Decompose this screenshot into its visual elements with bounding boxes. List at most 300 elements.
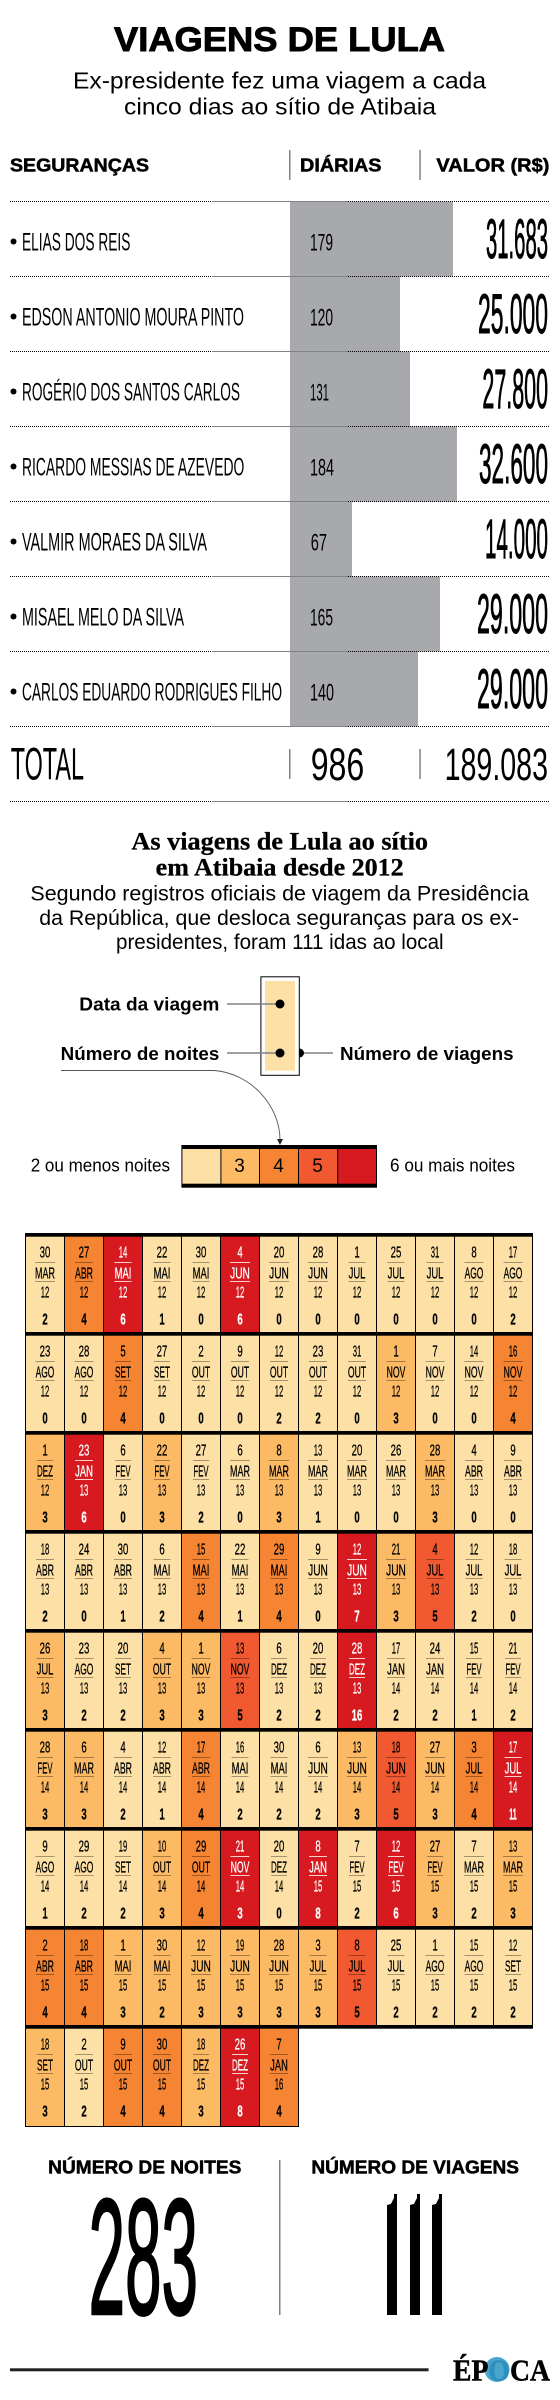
cell: 29 OUT 14 (182, 1827, 220, 1926)
cell: 19 JUN 15: 15 (236, 1977, 244, 1995)
calendar of trips (25, 1233, 533, 2127)
cell: 26 DEZ 15: DEZ (232, 2056, 248, 2074)
cell: 13 MAR 13 (298, 1431, 338, 1530)
calendar row 3 (26, 1431, 532, 1530)
cell: 24 ABR 13: ABR (75, 1560, 93, 1579)
cell: 23 OUT 12 (298, 1332, 338, 1431)
cell: 1 NOV 13: 13 (197, 1680, 205, 1698)
cell: 2 OUT 12: 12 (197, 1383, 205, 1401)
cell: 29 AGO 14: 14 (80, 1878, 88, 1896)
legend: how to read a cell (61, 977, 514, 1075)
cell: 29 OUT 14: 14 (197, 1878, 205, 1896)
cell: 12 JUL 13: 2 (471, 1607, 477, 1625)
cell: 21 FEV 14: 14 (509, 1680, 517, 1698)
cell: 21 JUN 13: 21 (392, 1540, 400, 1558)
cell: 6 FEV 13: 13 (119, 1482, 127, 1500)
cell: 3 JUL 14: 14 (470, 1779, 478, 1797)
cell: 7 NOV 12: NOV (426, 1362, 445, 1381)
calendar row 4 (26, 1530, 532, 1629)
cell: 23 AGO 12: 0 (42, 1409, 48, 1427)
cell: 16 MAI 14: MAI (232, 1759, 248, 1777)
cell: 16 MAI 14 (220, 1728, 260, 1827)
cell: 8 MAR 13: 8 (276, 1441, 282, 1459)
cell: 20 JUN 12: 12 (275, 1284, 283, 1302)
cell: 30 ABR 13: 13 (119, 1581, 127, 1599)
cell: 30 MAI 12: 0 (198, 1310, 204, 1328)
cell: 30 MAR 12 (26, 1233, 64, 1332)
cell: 2 ABR 15: 15 (41, 1977, 49, 1995)
cell: 13 NOV 13: 5 (237, 1706, 243, 1724)
row: Carlos Eduardo Rodrigues Filho (10, 652, 548, 726)
cell: 30 MAI 15: 2 (159, 2003, 165, 2021)
cell: 12 JUL 13: 12 (470, 1540, 478, 1558)
section intro text: Segundo registros oficiais de viagem da Presidência (30, 883, 529, 906)
row: Elias dos Reis: 179 (310, 230, 333, 256)
row: Edson Antonio Moura Pinto: 120 (310, 304, 333, 332)
cell: 3 JUL 14: 4 (471, 1805, 477, 1823)
cell: 23 AGO 13: 13 (80, 1680, 88, 1698)
cell: 6 DEZ 13: 13 (275, 1680, 283, 1698)
cell: 28 FEV 14 (26, 1728, 64, 1827)
cell: 7 NOV 12: 0 (432, 1409, 438, 1427)
cell: 12 JUL 13: 13 (470, 1581, 478, 1599)
cell: 16 NOV 12: 12 (509, 1383, 517, 1401)
cell: 20 JUN 12: JUN (269, 1264, 289, 1282)
cell: 22 FEV 13 (142, 1431, 182, 1530)
cell: 5 SET 12 (104, 1332, 142, 1431)
cell: 28 DEZ 13: 28 (352, 1639, 362, 1657)
cell: 26 JUL 13: JUL (37, 1660, 53, 1678)
cell: 30 MAI 14 (260, 1728, 298, 1827)
cell: 4 ABR 13 (454, 1431, 494, 1530)
cell: 8 JUL 15: 15 (353, 1977, 361, 1995)
title: VIAGENS DE LULA (114, 21, 445, 59)
cell: 12 ABR 14: 14 (158, 1779, 166, 1797)
cell: 6 DEZ 13: 2 (276, 1706, 282, 1724)
cell: 24 JAN 14: JAN (426, 1660, 444, 1678)
legend: how to read a cell: Número de noites (61, 1044, 219, 1064)
cell: 10 OUT 14: OUT (153, 1857, 171, 1876)
cell: 7 JAN 16: 7 (276, 2035, 282, 2053)
cell: 31 JUL 12: 0 (432, 1310, 438, 1328)
cell: 7 NOV 12 (416, 1332, 454, 1431)
cell: 6 MAI 13: 13 (158, 1581, 166, 1599)
cell: 6 MAR 14: MAR (74, 1758, 94, 1777)
cell: 6 FEV 13 (104, 1431, 142, 1530)
cell: 20 MAR 13: 20 (352, 1441, 362, 1459)
cell: 23 AGO 13: AGO (75, 1659, 93, 1678)
cell: 18 ABR 13 (26, 1530, 64, 1629)
cell: 28 JUN 15 (260, 1926, 298, 2025)
cell: 1 DEZ 12: DEZ (37, 1462, 53, 1480)
cell: 20 MAR 13 (338, 1431, 376, 1530)
cell: 13 JUN 14: 13 (353, 1738, 361, 1756)
cell: 21 FEV 14: 21 (509, 1639, 517, 1657)
cell: 1 JUL 12: 1 (354, 1243, 360, 1261)
table total: TOTAL (11, 738, 84, 790)
cell: 12 OUT 12: 2 (276, 1409, 282, 1427)
cell: 26 DEZ 15 (220, 2025, 260, 2126)
cell: 26 MAR 13: MAR (386, 1461, 406, 1480)
cell: 20 JUN 12: 20 (274, 1243, 284, 1261)
cell: 2 OUT 15: OUT (75, 2055, 93, 2074)
row: Carlos Eduardo Rodrigues Filho: CARLOS EDUARDO RODRIGUES FILHO (22, 678, 282, 706)
cell: 1 NOV 13: 1 (198, 1639, 204, 1657)
cell: 13 MAR 15 (494, 1827, 532, 1926)
cell: 9 AGO 14: 14 (41, 1878, 49, 1896)
cell: 28 JUN 12: JUN (308, 1264, 328, 1282)
cell: 23 OUT 12: OUT (309, 1362, 327, 1381)
calendar row 9 (26, 2025, 298, 2126)
calendar row 7 (26, 1827, 532, 1926)
cell: 17 AGO 12: 12 (509, 1284, 517, 1302)
cell: 1 NOV 12: 1 (393, 1342, 399, 1360)
section intro text (30, 883, 529, 954)
cell: 10 OUT 14: 14 (158, 1878, 166, 1896)
cell: 28 JUN 12: 0 (315, 1310, 321, 1328)
cell: 31 OUT 12 (338, 1332, 376, 1431)
cell: 19 JUN 15 (220, 1926, 260, 2025)
cell: 17 AGO 12 (494, 1233, 532, 1332)
cell: 10 OUT 14: 10 (158, 1837, 166, 1855)
cell: 12 ABR 14: ABR (153, 1758, 171, 1777)
cell: 18 JUN 14 (376, 1728, 416, 1827)
cell: 18 JUN 14: 5 (393, 1805, 399, 1823)
cell: 29 MAI 13: MAI (271, 1561, 287, 1579)
cell: 25 JUL 12: 0 (393, 1310, 399, 1328)
cell: 27 ABR 12: ABR (75, 1263, 93, 1282)
cell: 20 JUN 12: 0 (276, 1310, 282, 1328)
cell: 12 JUL 13: JUL (466, 1561, 482, 1579)
cell: 2 OUT 12: 0 (198, 1409, 204, 1427)
calendar row 1 (26, 1233, 532, 1332)
cell: 30 MAI 12: 30 (196, 1243, 206, 1261)
cell: 3 JUL 14: JUL (466, 1759, 482, 1777)
cell: 4 JUL 13 (416, 1530, 454, 1629)
cell: 26 MAR 13 (376, 1431, 416, 1530)
cell: 2 ABR 15: ABR (36, 1956, 54, 1975)
cell: 28 MAR 13: 13 (431, 1482, 439, 1500)
cell: 1 NOV 13: NOV (192, 1659, 211, 1678)
cell: 18 SET 15: 3 (42, 2102, 48, 2120)
cell: 1 MAI 15: 3 (120, 2003, 126, 2021)
cell: 31 OUT 12: 31 (353, 1342, 361, 1360)
cell: 29 MAI 13: 29 (274, 1540, 284, 1558)
cell: 28 AGO 12: 12 (80, 1383, 88, 1401)
cell: 28 AGO 12: 0 (81, 1409, 87, 1427)
cell: 8 JAN 15 (298, 1827, 338, 1926)
cell: 24 ABR 13: 0 (81, 1607, 87, 1625)
cell: 31 OUT 12: 0 (354, 1409, 360, 1427)
cell: 28 DEZ 13 (338, 1629, 376, 1728)
cell: 7 MAR 15: 7 (471, 1837, 477, 1855)
cell: 13 MAR 13: MAR (308, 1461, 328, 1480)
cell: 30 MAI 15: MAI (154, 1957, 170, 1975)
row: Valmir Moraes da Silva (10, 502, 548, 576)
cell: 13 JUN 14: 3 (354, 1805, 360, 1823)
cell: 29 OUT 14: OUT (192, 1857, 210, 1876)
cell: 20 SET 13 (104, 1629, 142, 1728)
cell: 27 ABR 12 (64, 1233, 104, 1332)
cell: 12 SET 15 (494, 1926, 532, 2025)
table header: SEGURANÇAS (10, 156, 149, 176)
cell: 1 JUL 12: 0 (354, 1310, 360, 1328)
cell: 16 NOV 12: 16 (509, 1342, 517, 1360)
cell: 8 JUL 15: 8 (354, 1936, 360, 1954)
cell: 8 MAR 13: 13 (275, 1482, 283, 1500)
cell: 3 JUL 15: 3 (315, 1936, 321, 1954)
cell: 25 JUL 15 (376, 1926, 416, 2025)
cell: 4 OUT 13: 3 (159, 1706, 165, 1724)
cell: 15 MAI 13: 4 (198, 1607, 204, 1625)
cell: 12 ABR 14: 12 (158, 1738, 166, 1756)
cell: 17 JUL 14: 17 (509, 1738, 517, 1756)
cell: 18 DEZ 15: 15 (197, 2076, 205, 2094)
cell: 9 OUT 12 (220, 1332, 260, 1431)
cell: 9 OUT 12: OUT (231, 1362, 249, 1381)
cell: 8 MAR 13 (260, 1431, 298, 1530)
cell: 31 JUL 12: JUL (427, 1264, 443, 1282)
cell: 13 MAR 13: 13 (314, 1482, 322, 1500)
cell: 7 JAN 16 (260, 2025, 298, 2126)
row: Misael Melo da Silva: MISAEL MELO DA SILVA (22, 604, 184, 632)
stat: numero de viagens: 111 (377, 2165, 450, 2352)
color scale legend (31, 1145, 515, 1188)
cell: 1 MAI 15: 15 (119, 1977, 127, 1995)
cell: 8 JAN 15: 15 (314, 1878, 322, 1896)
cell: 17 JUL 14: 11 (509, 1806, 517, 1824)
cell: 26 DEZ 15: 26 (235, 2035, 245, 2053)
cell: 4 JUL 13: 5 (432, 1607, 438, 1625)
cell: 18 ABR 15: ABR (75, 1956, 93, 1975)
legend: how to read a cell: Data da viagem (79, 995, 219, 1015)
cell: 28 FEV 14: 28 (40, 1738, 50, 1756)
cell: 12 OUT 12: 12 (275, 1342, 283, 1360)
cell: 30 MAR 12: 2 (42, 1310, 48, 1328)
cell: 8 AGO 12: 8 (471, 1243, 477, 1261)
cell: 4 ABR 14: 4 (120, 1738, 126, 1756)
cell: 18 JUL 13: 0 (510, 1607, 516, 1625)
cell: 18 JUL 13: JUL (505, 1561, 521, 1579)
cell: 25 JUL 12: 12 (392, 1284, 400, 1302)
cell: 20 DEZ 14: 14 (275, 1878, 283, 1896)
cell: 23 AGO 12: 12 (41, 1383, 49, 1401)
row: Rogerio dos Santos Carlos (10, 352, 548, 426)
cell: 15 FEV 14: FEV (466, 1660, 482, 1678)
cell: 4 ABR 13: 0 (471, 1508, 477, 1526)
cell: 8 MAR 13: MAR (269, 1461, 289, 1480)
cell: 7 FEV 15: 15 (353, 1878, 361, 1896)
table: segurancas, diarias e valor (10, 150, 550, 802)
cell: 13 MAR 15: 15 (509, 1878, 517, 1896)
cell: 15 AGO 15 (454, 1926, 494, 2025)
cell: 22 MAI 13: 1 (237, 1607, 243, 1625)
cell: 28 DEZ 13: DEZ (349, 1660, 365, 1678)
cell: 6 MAI 13 (142, 1530, 182, 1629)
cell: 3 JUL 14: 3 (471, 1738, 477, 1756)
cell: 30 OUT 15: 30 (157, 2035, 167, 2053)
cell: 25 JUL 12: JUL (388, 1264, 404, 1282)
cell: 9 OUT 12: 0 (237, 1409, 243, 1427)
row: Carlos Eduardo Rodrigues Filho: 140 (310, 680, 334, 706)
cell: 14 NOV 12: 12 (470, 1383, 478, 1401)
cell: 28 JUN 12 (298, 1233, 338, 1332)
cell: 1 AGO 15: 2 (432, 2003, 438, 2021)
cell: 4 OUT 13: OUT (153, 1659, 171, 1678)
cell: 4 JUN 12: 4 (237, 1243, 243, 1261)
cell: 30 MAI 14: 2 (276, 1805, 282, 1823)
cell: 20 MAR 13: MAR (347, 1461, 367, 1480)
cell: 27 FEV 15 (416, 1827, 454, 1926)
cell: 28 AGO 12: 28 (79, 1342, 89, 1360)
cell: 20 DEZ 14: 20 (274, 1837, 284, 1855)
cell: 30 OUT 15: 4 (159, 2102, 165, 2120)
cell: 7 FEV 15: FEV (349, 1858, 365, 1876)
cell: 14 NOV 12: 14 (470, 1342, 478, 1360)
cell: 1 AGO 15: 1 (432, 1936, 438, 1954)
row: Elias dos Reis (10, 202, 548, 276)
cell: 17 JAN 14: 17 (392, 1639, 400, 1657)
cell: 12 OUT 12: OUT (270, 1362, 288, 1381)
cell: 29 MAI 13: 4 (276, 1607, 282, 1625)
cell: 30 OUT 15: OUT (153, 2055, 171, 2074)
cell: 13 MAR 13: 1 (315, 1508, 321, 1526)
cell: 22 MAI 12: 12 (158, 1284, 166, 1302)
cell: 17 JUL 14 (494, 1728, 532, 1827)
cell: 18 ABR 13: 2 (42, 1607, 48, 1625)
stat: numero de noites: 283 (89, 2165, 198, 2349)
cell: 21 JUN 13: 3 (393, 1607, 399, 1625)
cell: 8 AGO 12: 0 (471, 1310, 477, 1328)
cell: 22 MAI 12 (142, 1233, 182, 1332)
cell: 30 ABR 13: 1 (120, 1607, 126, 1625)
cell: 21 NOV 14: NOV (231, 1857, 250, 1876)
cell: 12 JUL 13 (454, 1530, 494, 1629)
cell: 21 FEV 14 (494, 1629, 532, 1728)
legend: how to read a cell: Número de viagens (340, 1044, 514, 1064)
cell: 16 MAI 14: 2 (237, 1805, 243, 1823)
cell: 24 JAN 14: 2 (432, 1706, 438, 1724)
cell: 16 NOV 12 (494, 1332, 532, 1431)
cell: 9 OUT 12: 9 (237, 1342, 243, 1360)
cell: 23 AGO 12: AGO (36, 1362, 54, 1381)
cell: 18 SET 15 (26, 2025, 64, 2126)
cell: 12 JUN 13: 12 (353, 1540, 361, 1558)
table header: VALOR (R$) (436, 156, 549, 176)
cell: 12 FEV 15 (376, 1827, 416, 1926)
cell: 25 JUL 15: JUL (388, 1957, 404, 1975)
cell: 8 JUL 15: 5 (354, 2003, 360, 2021)
cell: 9 OUT 15 (104, 2025, 142, 2126)
cell: 20 MAR 13: 0 (354, 1508, 360, 1526)
row: Edson Antonio Moura Pinto: EDSON ANTONIO MOURA PINTO (22, 304, 244, 332)
cell: 18 SET 15: 15 (41, 2076, 49, 2094)
cell: 9 JUN 13 (298, 1530, 338, 1629)
cell: 21 NOV 14: 3 (237, 1904, 243, 1922)
cell: 31 OUT 12: OUT (348, 1362, 366, 1381)
cell: 29 AGO 14 (64, 1827, 104, 1926)
cell: 18 JUN 14: 14 (392, 1779, 400, 1797)
cell: 19 SET 14 (104, 1827, 142, 1926)
row: Edson Antonio Moura Pinto (10, 276, 548, 352)
cell: 18 JUN 14: JUN (386, 1759, 406, 1777)
cell: 26 JUL 13: 26 (40, 1639, 50, 1657)
cell: 7 NOV 12: 12 (431, 1383, 439, 1401)
cell: 28 AGO 12: AGO (75, 1362, 93, 1381)
cell: 4 JUN 12: JUN (230, 1264, 250, 1282)
cell: 2 OUT 15: 2 (81, 2102, 87, 2120)
cell: 6 MAR 13: 13 (236, 1482, 244, 1500)
cell: 21 JUN 13: 13 (392, 1581, 400, 1599)
cell: 12 FEV 15: 6 (393, 1904, 399, 1922)
cell: 18 JUL 13: 13 (509, 1581, 517, 1599)
cell: 15 FEV 14: 15 (470, 1639, 478, 1657)
color scale legend: 4 (273, 1156, 284, 1177)
cell: 18 DEZ 15: DEZ (193, 2056, 209, 2074)
cell: 17 AGO 12: AGO (504, 1263, 522, 1282)
cell: 27 FEV 15: 27 (430, 1837, 440, 1855)
cell: 26 JUL 13: 3 (42, 1706, 48, 1724)
calendar row 2 (26, 1332, 532, 1431)
cell: 9 JUN 13: 0 (315, 1607, 321, 1625)
cell: 23 AGO 13: 2 (81, 1706, 87, 1724)
cell: 12 JUN 15: 12 (197, 1936, 205, 1954)
cell: 20 SET 13: 13 (119, 1680, 127, 1698)
cell: 17 AGO 12: 17 (509, 1243, 517, 1261)
cell: 29 MAI 13 (260, 1530, 298, 1629)
cell: 15 FEV 14: 1 (471, 1706, 477, 1724)
cell: 26 MAR 13: 13 (392, 1482, 400, 1500)
cell: 19 JUN 15: 19 (236, 1936, 244, 1954)
cell: 30 MAI 15 (142, 1926, 182, 2025)
cell: 5 SET 12: 5 (120, 1342, 126, 1360)
cell: 27 ABR 12: 4 (81, 1310, 87, 1328)
cell: 22 MAI 13: 13 (236, 1581, 244, 1599)
cell: 28 AGO 12 (64, 1332, 104, 1431)
cell: 1 NOV 13: 3 (198, 1706, 204, 1724)
stat: numero de noites: NÚMERO DE NOITES (48, 2157, 241, 2178)
cell: 6 MAR 14 (64, 1728, 104, 1827)
cell: 23 OUT 12: 12 (314, 1383, 322, 1401)
cell: 1 MAI 15: MAI (115, 1957, 131, 1975)
cell: 8 JUL 15: JUL (349, 1957, 365, 1975)
cell: 7 JAN 16: 4 (276, 2102, 282, 2120)
cell: 7 NOV 12: 7 (432, 1342, 438, 1360)
cell: 14 MAI 12: 14 (119, 1243, 127, 1261)
cell: 20 DEZ 13: 20 (313, 1639, 323, 1657)
cell: 17 ABR 14 (182, 1728, 220, 1827)
cell: 20 DEZ 14: DEZ (271, 1858, 287, 1876)
cell: 28 DEZ 13: 16 (352, 1706, 362, 1724)
cell: 4 JUN 12: 12 (236, 1284, 244, 1302)
cell: 20 JUN 12 (260, 1233, 298, 1332)
row: Ricardo Messias de Azevedo (10, 426, 548, 502)
cell: 9 OUT 15: 9 (120, 2035, 126, 2053)
cell: 22 FEV 13: 3 (159, 1508, 165, 1526)
cell: 22 FEV 13: FEV (154, 1462, 170, 1480)
cell: 18 JUL 13 (494, 1530, 532, 1629)
cell: 17 ABR 14: 17 (197, 1738, 205, 1756)
cell: 13 NOV 13: 13 (236, 1680, 244, 1698)
cell: 14 MAI 12 (104, 1233, 142, 1332)
cell: 4 JUL 13: JUL (427, 1561, 443, 1579)
cell: 27 SET 12: SET (154, 1362, 170, 1381)
row: Ricardo Messias de Azevedo: 184 (310, 454, 334, 482)
cell: 26 MAR 13: 26 (391, 1441, 401, 1459)
cell: 4 JUL 13: 4 (432, 1540, 438, 1558)
cell: 12 FEV 15: 12 (392, 1837, 400, 1855)
cell: 15 AGO 15: AGO (465, 1956, 483, 1975)
